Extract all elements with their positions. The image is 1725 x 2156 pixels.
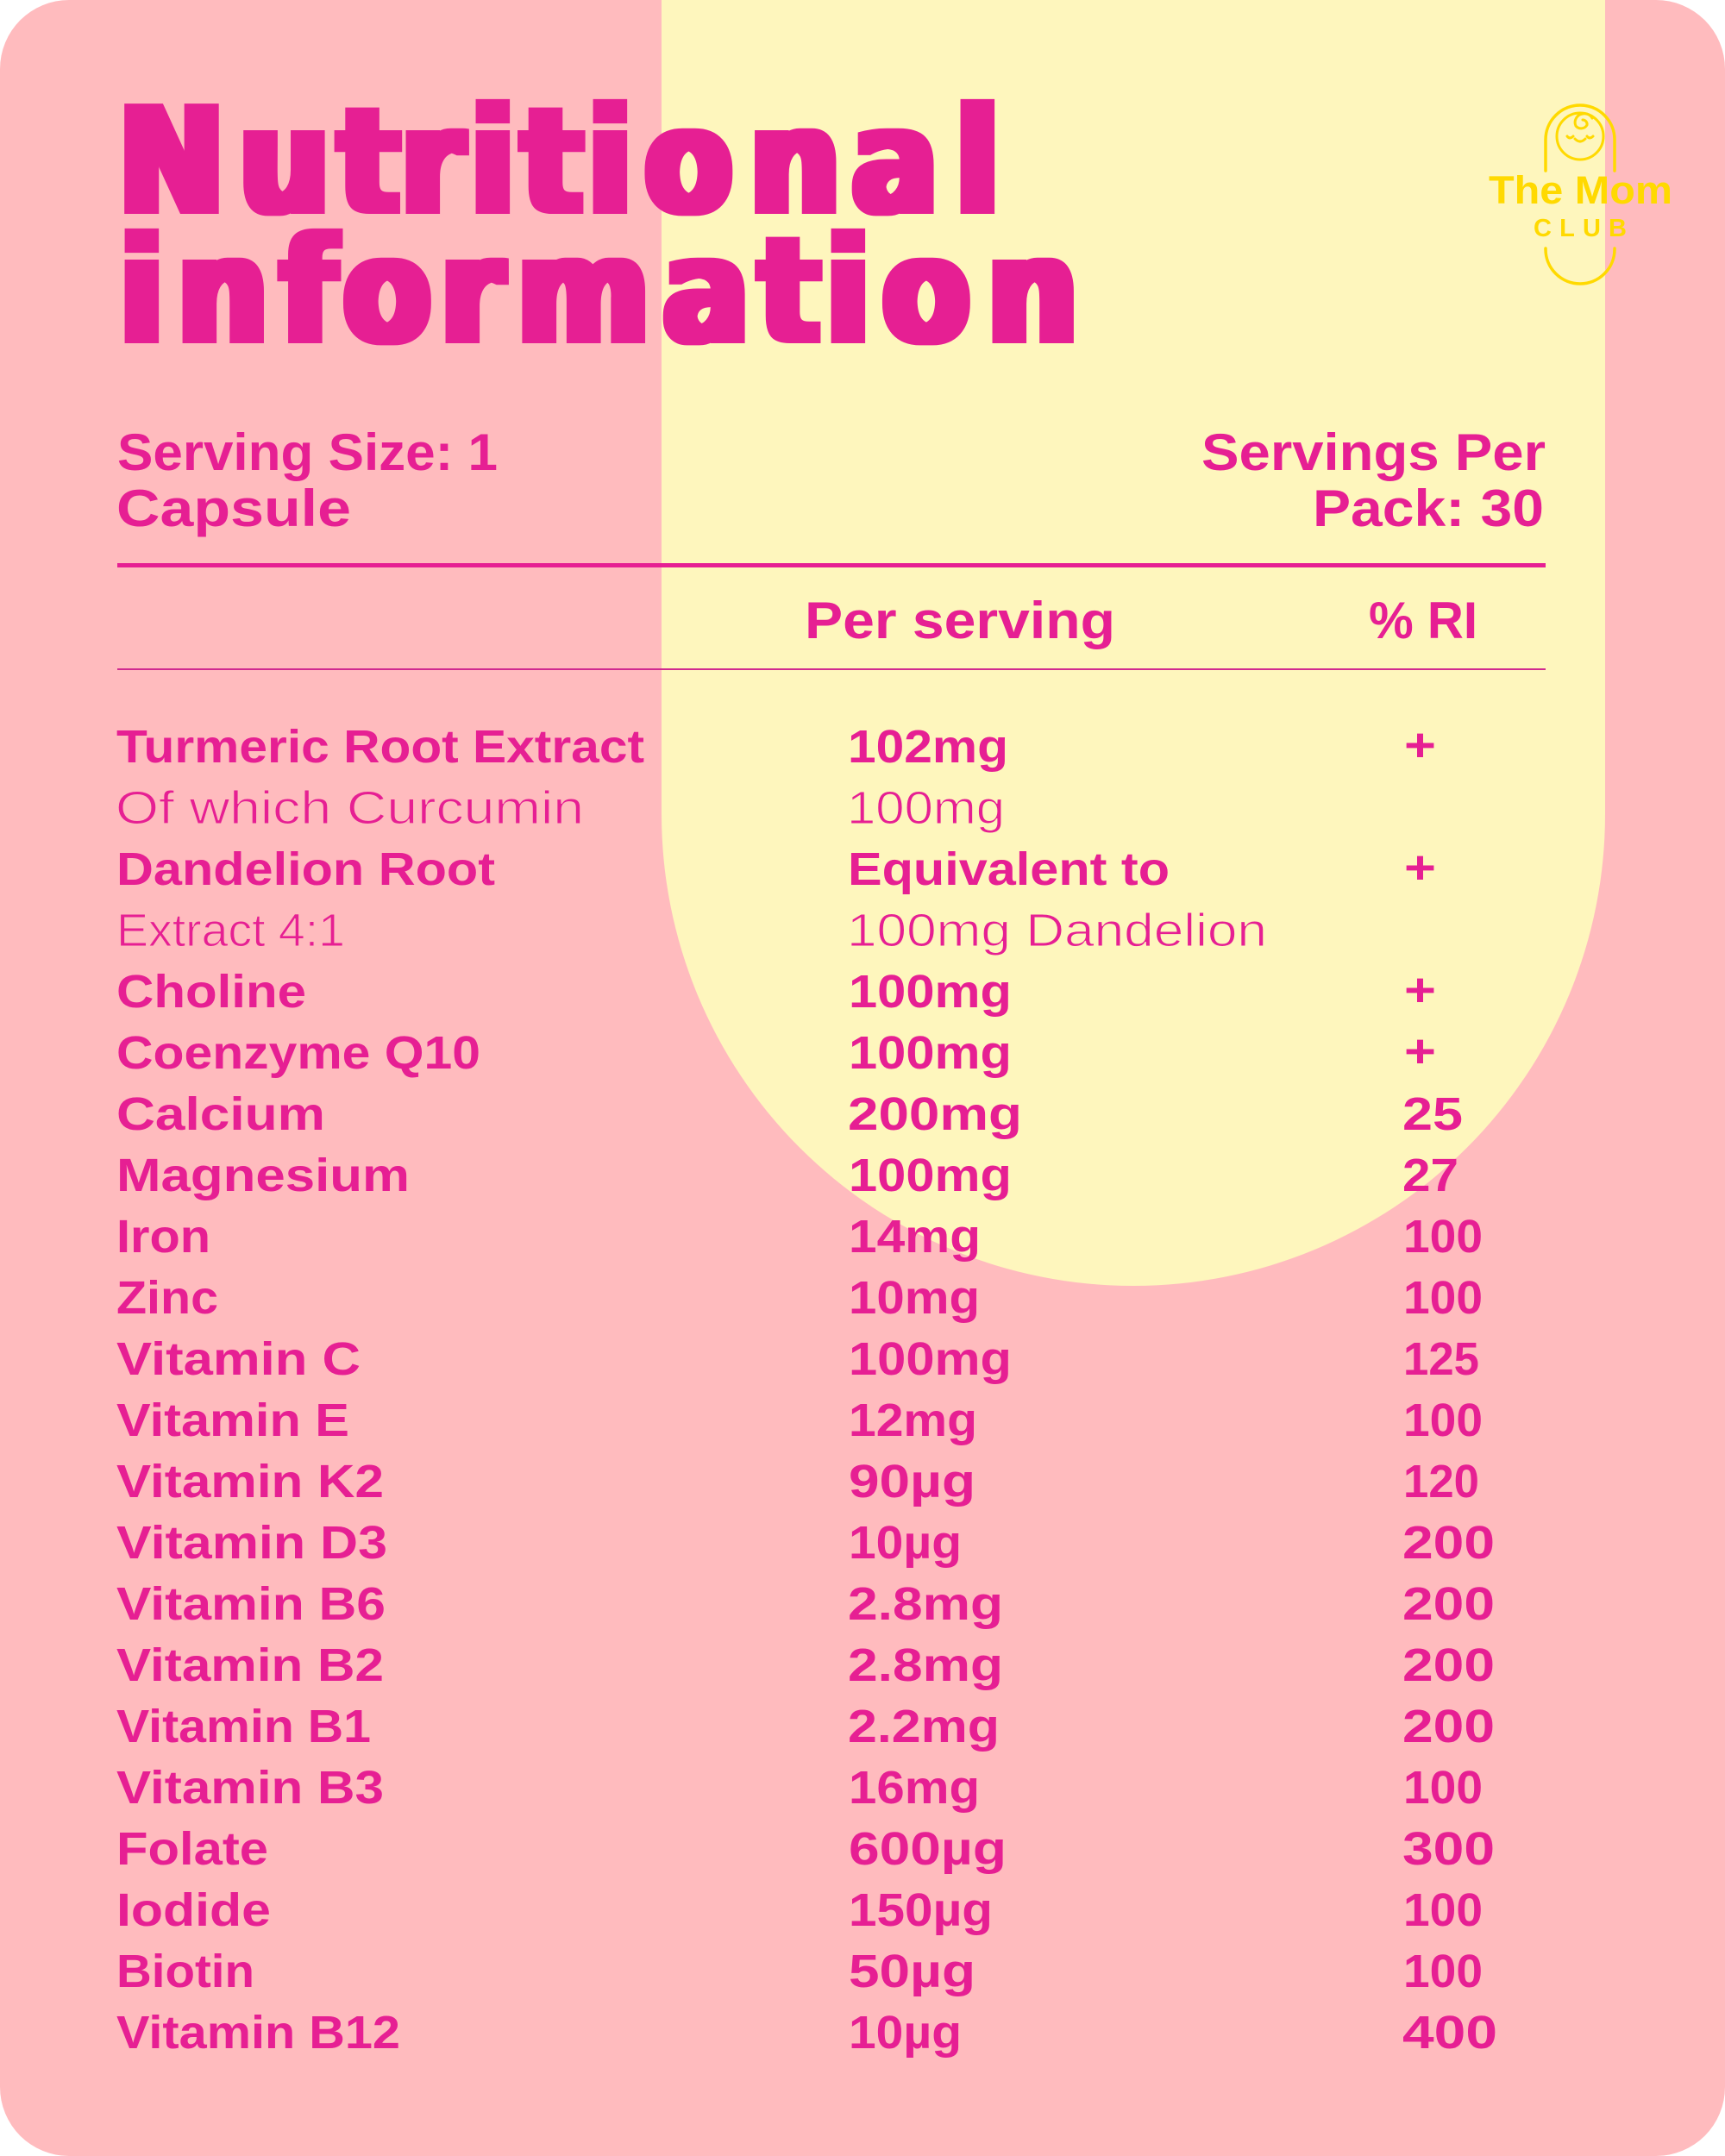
row: Folate: 300 [1402,1823,1495,1875]
column header: per serving: Per serving [805,592,1115,649]
row: Coenzyme Q10: 100mg [849,1027,1012,1079]
logo: The Mom Club [1489,105,1672,284]
row: Vitamin B2: Vitamin B2 [116,1639,384,1691]
row: Iron: 100 [1403,1211,1483,1263]
row: Vitamin B12: 10µg [849,2007,962,2059]
row: Vitamin D3: Vitamin D3 [116,1517,387,1569]
row: Folate [116,1823,1495,1875]
row: Vitamin B12 [116,2007,1497,2059]
row: Vitamin E: Vitamin E [116,1395,349,1446]
row: Vitamin B1: 2.2mg [848,1701,1000,1752]
servings per pack: Servings Per [1201,423,1546,481]
row: Vitamin C [116,1333,1479,1385]
row: Vitamin B2: 2.8mg [848,1639,1003,1691]
row: Vitamin B6 [116,1578,1495,1630]
row: Vitamin B2 [116,1639,1495,1691]
row: Dandelion Root: + [1404,842,1436,893]
logo wordmark: The Mom [1489,168,1672,212]
row: Vitamin B2: 200 [1402,1639,1495,1691]
row: Of which Curcumin: Of which Curcumin [116,782,584,834]
row: Zinc: Zinc [116,1272,218,1324]
title: information [120,206,1077,377]
icon: capsule outline top [1546,105,1615,171]
row: Dandelion Root: Equivalent to [848,843,1170,895]
row: Choline: + [1404,964,1436,1016]
row: Calcium: Calcium [116,1088,325,1140]
servings per pack [1201,423,1546,537]
row: Iron: 14mg [849,1211,981,1263]
row: Choline: 100mg [849,966,1012,1018]
row: Biotin: 100 [1403,1946,1483,1997]
row: Iodide [116,1884,1483,1936]
icon: capsule outline bottom [1546,248,1615,284]
row: Vitamin C: Vitamin C [116,1333,361,1385]
title: Nutritional [119,77,999,248]
row: Vitamin B3: Vitamin B3 [116,1762,384,1814]
row: Iron [116,1211,1483,1263]
row: Vitamin K2 [116,1456,1479,1507]
row: Iron: Iron [116,1211,210,1263]
nutrition table [116,719,1497,2059]
row: Turmeric Root Extract: + [1404,719,1436,771]
row: Vitamin D3: 10µg [849,1517,962,1569]
row: Vitamin B3 [116,1762,1483,1814]
row: Vitamin B1: 200 [1402,1701,1495,1752]
row: Vitamin B1 [116,1701,1495,1752]
row: Vitamin C: 100mg [849,1333,1012,1385]
serving size: Serving Size: 1 [117,423,498,481]
background shape: yellow arch [662,0,1605,1286]
serving size [116,423,498,537]
title [119,77,1077,377]
row: Biotin: 50µg [849,1946,975,1997]
row: Calcium [116,1088,1463,1140]
row: Iodide: Iodide [116,1884,271,1936]
row: Vitamin K2: 90µg [849,1456,975,1507]
row: Coenzyme Q10: + [1404,1025,1436,1077]
row: Coenzyme Q10 [116,1025,1436,1079]
row: Vitamin K2: 120 [1403,1456,1479,1507]
serving size: Capsule [116,479,351,537]
row: Coenzyme Q10: Coenzyme Q10 [116,1027,480,1079]
row: Dandelion Root [116,842,1436,895]
row: Vitamin B3: 16mg [849,1762,980,1814]
row: Vitamin D3: 200 [1402,1517,1495,1569]
row: Extract 4:1: 100mg Dandelion [847,905,1267,956]
row: Vitamin B12: 400 [1402,2007,1497,2059]
row: Iodide: 100 [1403,1884,1483,1936]
row: Biotin: Biotin [116,1946,254,1997]
row: Of which Curcumin: 100mg [847,782,1005,834]
row: Extract 4:1: Extract 4:1 [116,905,345,956]
row: Biotin [116,1946,1483,1997]
row: Magnesium: Magnesium [116,1150,410,1201]
row: Vitamin E [116,1395,1483,1446]
row: Magnesium: 27 [1402,1150,1458,1201]
row: Folate: 600µg [849,1823,1007,1875]
row: Turmeric Root Extract: Turmeric Root Extract [116,721,644,773]
row: Vitamin B1: Vitamin B1 [116,1701,371,1752]
logo subtitle: CLUB [1534,215,1627,242]
row: Vitamin B6: Vitamin B6 [116,1578,386,1630]
row: Turmeric Root Extract: 102mg [848,721,1008,773]
row: Magnesium: 100mg [849,1150,1012,1201]
row: Extract 4:1 [116,905,1267,956]
row: Zinc: 100 [1403,1272,1483,1324]
column header: percent RI: % RI [1369,592,1477,649]
row: Calcium: 25 [1402,1088,1463,1140]
row: Vitamin B12: Vitamin B12 [116,2007,400,2059]
row: Vitamin C: 125 [1403,1333,1479,1385]
row: Of which Curcumin [116,782,1005,834]
row: Folate: Folate [116,1823,268,1875]
row: Iodide: 150µg [849,1884,993,1936]
row: Choline [116,964,1436,1018]
row: Vitamin B6: 2.8mg [848,1578,1003,1630]
row: Choline: Choline [116,966,306,1018]
icon: baby face [1557,113,1603,160]
row: Zinc [116,1272,1483,1324]
row: Vitamin B3: 100 [1403,1762,1483,1814]
servings per pack: Pack: 30 [1313,479,1544,537]
row: Calcium: 200mg [848,1088,1022,1140]
row: Zinc: 10mg [849,1272,980,1324]
row: Magnesium [116,1150,1458,1201]
row: Vitamin E: 12mg [849,1395,977,1446]
row: Vitamin B6: 200 [1402,1578,1495,1630]
row: Vitamin D3 [116,1517,1495,1569]
row: Vitamin K2: Vitamin K2 [116,1456,384,1507]
row: Turmeric Root Extract [116,719,1436,773]
row: Dandelion Root: Dandelion Root [116,843,495,895]
row: Vitamin E: 100 [1403,1395,1483,1446]
